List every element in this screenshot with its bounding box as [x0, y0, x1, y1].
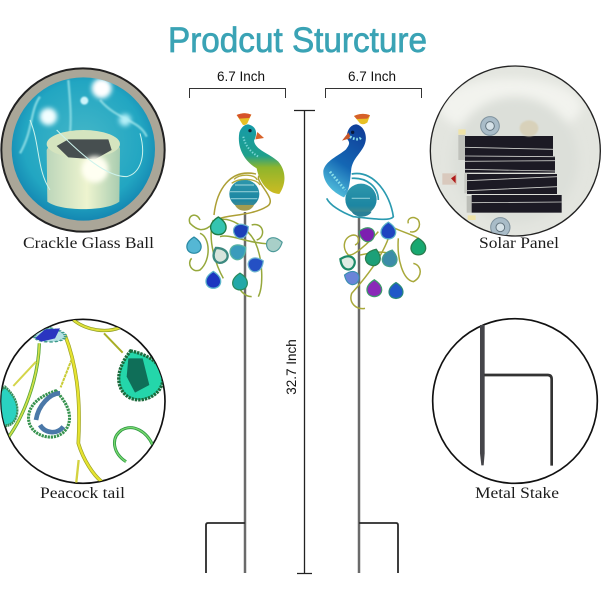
label: metal stake: Metal Stake [475, 485, 559, 502]
label: peacock tail: Peacock tail [40, 485, 126, 502]
gems [338, 222, 426, 298]
gems [187, 217, 284, 290]
peacock: left [187, 113, 284, 297]
label: crackle glass ball: Crackle Glass Ball [23, 235, 155, 252]
panel: peacock tail [0, 319, 169, 485]
dimension: right width: 6.7 Inch [348, 69, 396, 84]
stake: right [359, 217, 398, 573]
panel: crackle glass ball [1, 68, 165, 232]
ball [345, 184, 377, 215]
dimension: height: 32.7 Inch [284, 339, 299, 395]
body [239, 124, 284, 194]
stake: left [206, 212, 245, 573]
dimension: left width [190, 69, 286, 98]
dimension: right width [326, 69, 422, 98]
panel: metal stake [433, 319, 597, 483]
title: Prodcut Sturcture [168, 21, 427, 60]
ball [229, 180, 259, 208]
dimension: height [284, 110, 315, 574]
dimension: left width: 6.7 Inch [217, 69, 265, 84]
label: solar panel: Solar Panel [479, 235, 560, 252]
body [323, 124, 366, 197]
panel: solar panel [430, 66, 600, 237]
peacock: right [323, 114, 426, 309]
